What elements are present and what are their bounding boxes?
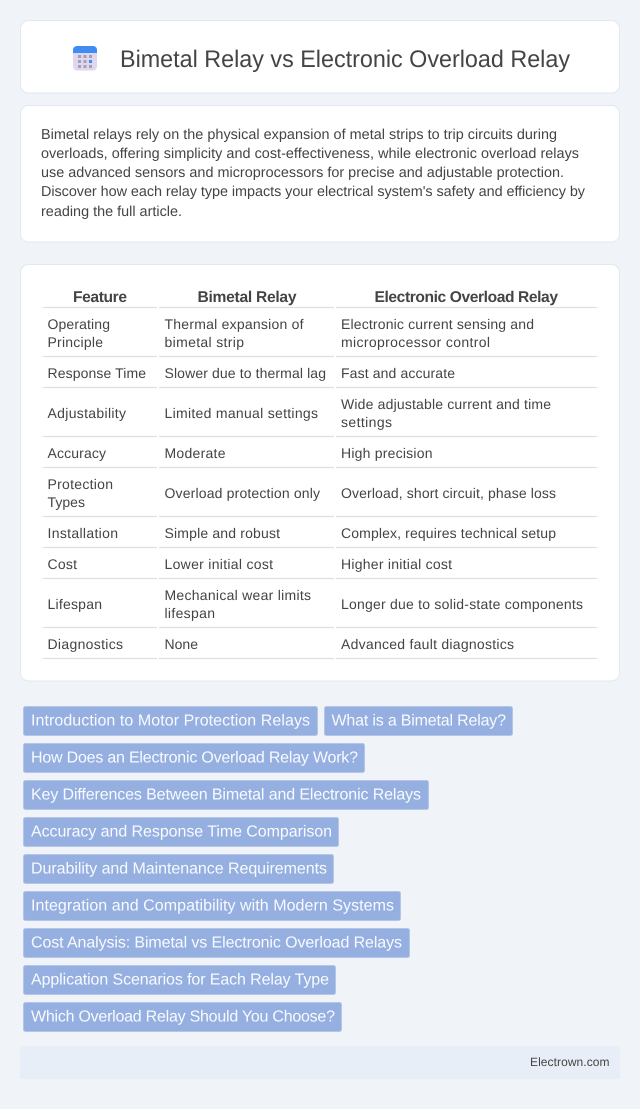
row: adjustability: Limited manual settings: [164, 405, 318, 421]
row: operating principle: Thermal expansion of: [164, 316, 304, 332]
row: diagnostics: Diagnostics: [48, 636, 123, 652]
link: accuracy: Accuracy and Response Time Comparison: [31, 824, 332, 840]
row: operating principle: Principle: [48, 334, 103, 350]
table header row: Feature: [73, 289, 127, 306]
row: response time: Response Time: [48, 365, 146, 381]
row: adjustability: Wide adjustable current and time: [341, 396, 551, 412]
row: installation: Simple and robust: [164, 525, 280, 541]
row: cost: [48, 556, 452, 572]
text block: summary paragraph: reading the full article.: [41, 204, 182, 220]
row: response time: [48, 365, 455, 381]
text block: summary paragraph: overloads, offering simplicity and cost-effectiveness, while electronic overload relays: [41, 146, 579, 162]
table header row: Bimetal Relay: [198, 289, 297, 306]
link: key differences: Key Differences Between Bimetal and Electronic Relays: [31, 786, 421, 804]
row: lifespan: [48, 587, 583, 621]
text block: summary paragraph: Discover how each relay type impacts your electrical system's safety and efficiency by: [41, 184, 586, 200]
row: lifespan: Mechanical wear limits: [164, 587, 311, 603]
link: what is a bimetal relay: What is a Bimetal Relay?: [332, 712, 506, 730]
link: application scenarios: [24, 966, 336, 994]
row: adjustability: settings: [341, 414, 392, 430]
row: diagnostics: None: [164, 636, 198, 652]
row: operating principle: Operating: [48, 316, 110, 332]
row: diagnostics: [48, 636, 514, 652]
row: accuracy: Moderate: [164, 445, 226, 461]
text block: summary paragraph: use advanced sensors and microprocessors for precise and adjustable protection.: [41, 165, 564, 181]
link: what is a bimetal relay: [324, 706, 512, 736]
link: cost analysis: [24, 928, 410, 958]
link: integration: [24, 892, 400, 920]
row: adjustability: Adjustability: [48, 405, 126, 421]
row: response time: Slower due to thermal lag: [164, 365, 326, 381]
panel: introduction: [20, 106, 620, 242]
row: installation: Installation: [48, 525, 118, 541]
row: accuracy: Accuracy: [48, 445, 106, 461]
link: which relay: Which Overload Relay Should You Choose?: [31, 1008, 335, 1026]
text block: summary paragraph: [41, 127, 586, 220]
link: introduction: [24, 706, 318, 736]
link: electronic overload relay: [24, 744, 364, 772]
row: protection types: Overload, short circuit, phase loss: [341, 485, 556, 501]
row: lifespan: lifespan: [164, 605, 215, 621]
link: accuracy: [24, 818, 338, 846]
row: operating principle: Electronic current sensing and: [341, 316, 534, 332]
row: installation: [48, 525, 556, 541]
row: adjustability: [48, 396, 551, 430]
icon: calendar grid: [73, 46, 97, 70]
row: protection types: Types: [48, 494, 85, 510]
link: introduction: Introduction to Motor Protection Relays: [31, 712, 310, 730]
row: operating principle: [48, 316, 534, 350]
row: response time: Fast and accurate: [341, 365, 455, 381]
link: key differences: [24, 780, 428, 810]
title: Bimetal Relay vs Electronic Overload Relay: [120, 46, 570, 73]
link: durability: [24, 854, 334, 884]
row: accuracy: [48, 445, 432, 461]
row: diagnostics: Advanced fault diagnostics: [341, 636, 514, 652]
link: which relay: [24, 1002, 342, 1032]
table header row: [73, 289, 558, 306]
panel: comparison table: [20, 264, 620, 681]
text block: summary paragraph: Bimetal relays rely on the physical expansion of metal strips to trip circuits during: [41, 127, 557, 143]
footer source text: Electrown.com: [530, 1055, 610, 1069]
link: integration: Integration and Compatibility with Modern Systems: [31, 898, 394, 914]
panel: header: [20, 20, 620, 93]
row: cost: Higher initial cost: [341, 556, 452, 572]
row: installation: Complex, requires technical setup: [341, 525, 556, 541]
row: protection types: [48, 476, 556, 510]
row: lifespan: Longer due to solid-state components: [341, 596, 583, 612]
row: cost: Cost: [48, 556, 77, 572]
link: application scenarios: Application Scenarios for Each Relay Type: [31, 972, 329, 988]
row: cost: Lower initial cost: [164, 556, 273, 572]
row: protection types: Overload protection only: [164, 485, 320, 501]
panel: table of contents links: [24, 706, 512, 1032]
row: protection types: Protection: [48, 476, 113, 492]
row: operating principle: microprocessor control: [341, 334, 490, 350]
row: lifespan: Lifespan: [48, 596, 102, 612]
link: electronic overload relay: How Does an Electronic Overload Relay Work?: [31, 750, 358, 766]
row: operating principle: bimetal strip: [164, 334, 244, 350]
row: accuracy: High precision: [341, 445, 432, 461]
link: cost analysis: Cost Analysis: Bimetal vs Electronic Overload Relays: [31, 934, 402, 952]
table header row: Electronic Overload Relay: [374, 289, 558, 306]
footer: [20, 1046, 620, 1079]
link: durability: Durability and Maintenance Requirements: [31, 860, 327, 878]
